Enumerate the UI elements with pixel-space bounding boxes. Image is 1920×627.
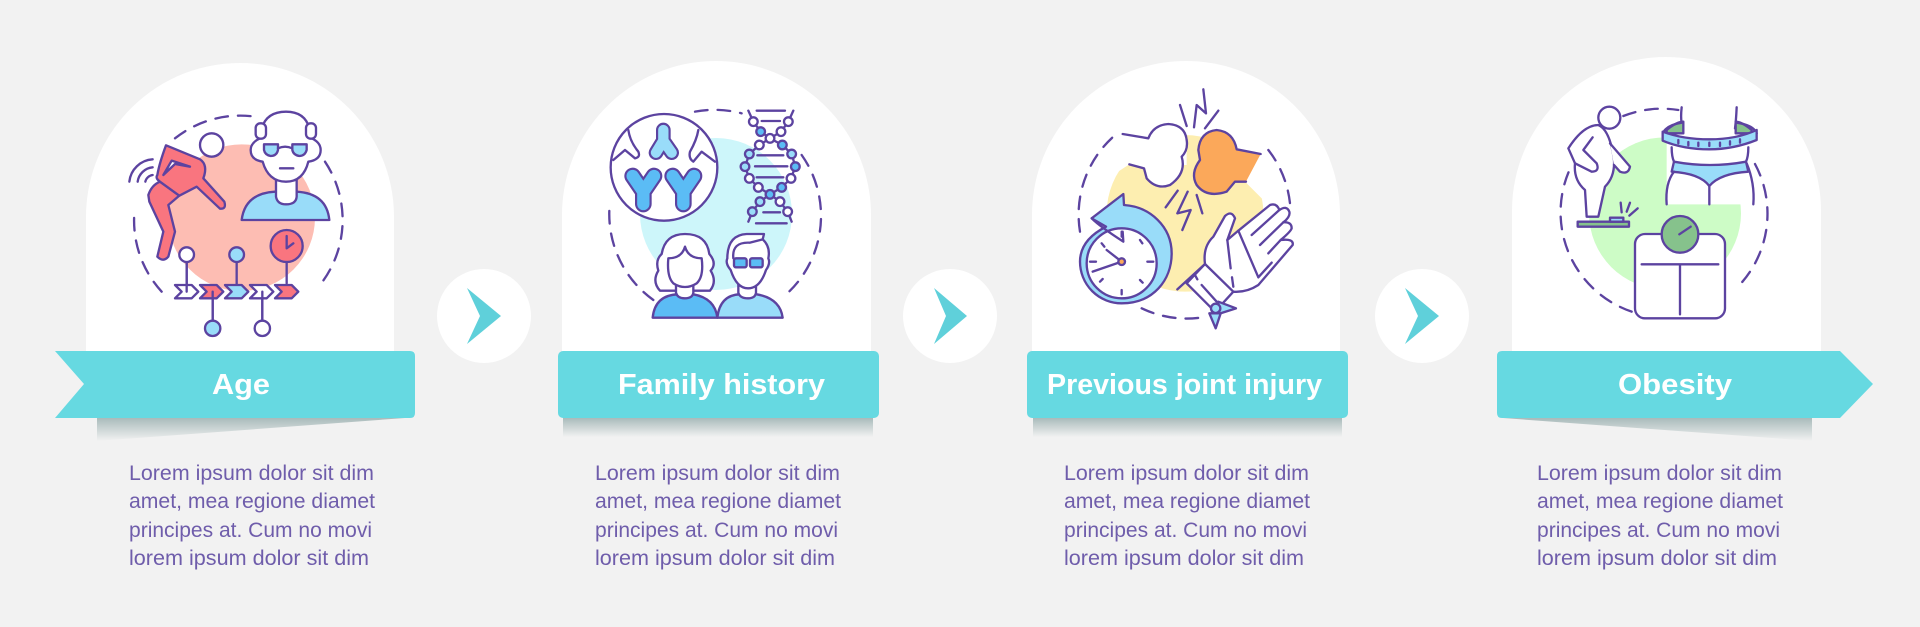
banner: obesity bbox=[1497, 351, 1873, 418]
text block: family history: Lorem ipsum dolor sit dim bbox=[595, 462, 840, 485]
arrow: step 2 to 3 bbox=[903, 269, 997, 363]
text block: family history: amet, mea regione diamet bbox=[595, 490, 841, 513]
text block: obesity bbox=[1537, 462, 1783, 570]
text block: previous joint injury: Lorem ipsum dolor sit dim bbox=[1064, 462, 1309, 485]
text block: age bbox=[129, 462, 375, 570]
text block: age: Lorem ipsum dolor sit dim bbox=[129, 462, 374, 485]
banner: age bbox=[55, 351, 415, 418]
banner shadow: obesity bbox=[1503, 418, 1812, 441]
icon: broken joint, clock and bandaged hand bbox=[1079, 89, 1293, 328]
banner: family history bbox=[558, 351, 879, 418]
panel: family history bbox=[558, 61, 879, 570]
card: previous joint injury arch bbox=[1032, 61, 1340, 355]
text block: family history: principes at. Cum no movi bbox=[595, 519, 838, 542]
text block: obesity: lorem ipsum dolor sit dim bbox=[1537, 547, 1777, 570]
text block: previous joint injury: amet, mea regione diamet bbox=[1064, 490, 1310, 513]
banner shadow: previous joint injury bbox=[1033, 418, 1342, 437]
heading: previous joint injury: Previous joint injury bbox=[1047, 369, 1322, 401]
text block: family history bbox=[595, 462, 841, 570]
text block: obesity: Lorem ipsum dolor sit dim bbox=[1537, 462, 1782, 485]
text block: obesity: principes at. Cum no movi bbox=[1537, 519, 1780, 542]
banner: previous joint injury bbox=[1027, 351, 1348, 418]
heading: obesity: Obesity bbox=[1618, 369, 1732, 401]
heading: family history: Family history bbox=[618, 369, 825, 401]
panel: age bbox=[55, 63, 415, 570]
banner shadow: family history bbox=[563, 418, 873, 437]
text block: age: principes at. Cum no movi bbox=[129, 519, 372, 542]
text block: age: amet, mea regione diamet bbox=[129, 490, 375, 513]
icon: antibodies, dna and family bbox=[609, 110, 821, 318]
panel: obesity bbox=[1497, 57, 1873, 570]
arrow: step 3 to 4 bbox=[1375, 269, 1469, 363]
panel: previous joint injury bbox=[1027, 61, 1348, 570]
banner shadow: age bbox=[97, 418, 405, 441]
card: age arch bbox=[86, 63, 394, 355]
text block: previous joint injury bbox=[1064, 462, 1310, 570]
card: family history arch bbox=[562, 61, 871, 355]
text block: previous joint injury: principes at. Cum no movi bbox=[1064, 519, 1307, 542]
card: obesity arch bbox=[1512, 57, 1821, 355]
text block: age: lorem ipsum dolor sit dim bbox=[129, 547, 369, 570]
text block: family history: lorem ipsum dolor sit dim bbox=[595, 547, 835, 570]
heading: age: Age bbox=[212, 369, 270, 401]
icon: obesity figure, waist and scale bbox=[1561, 107, 1767, 318]
text block: obesity: amet, mea regione diamet bbox=[1537, 490, 1783, 513]
text block: previous joint injury: lorem ipsum dolor sit dim bbox=[1064, 547, 1304, 570]
icon: aging knee and elderly man bbox=[129, 112, 343, 336]
arrow: step 1 to 2 bbox=[437, 269, 531, 363]
